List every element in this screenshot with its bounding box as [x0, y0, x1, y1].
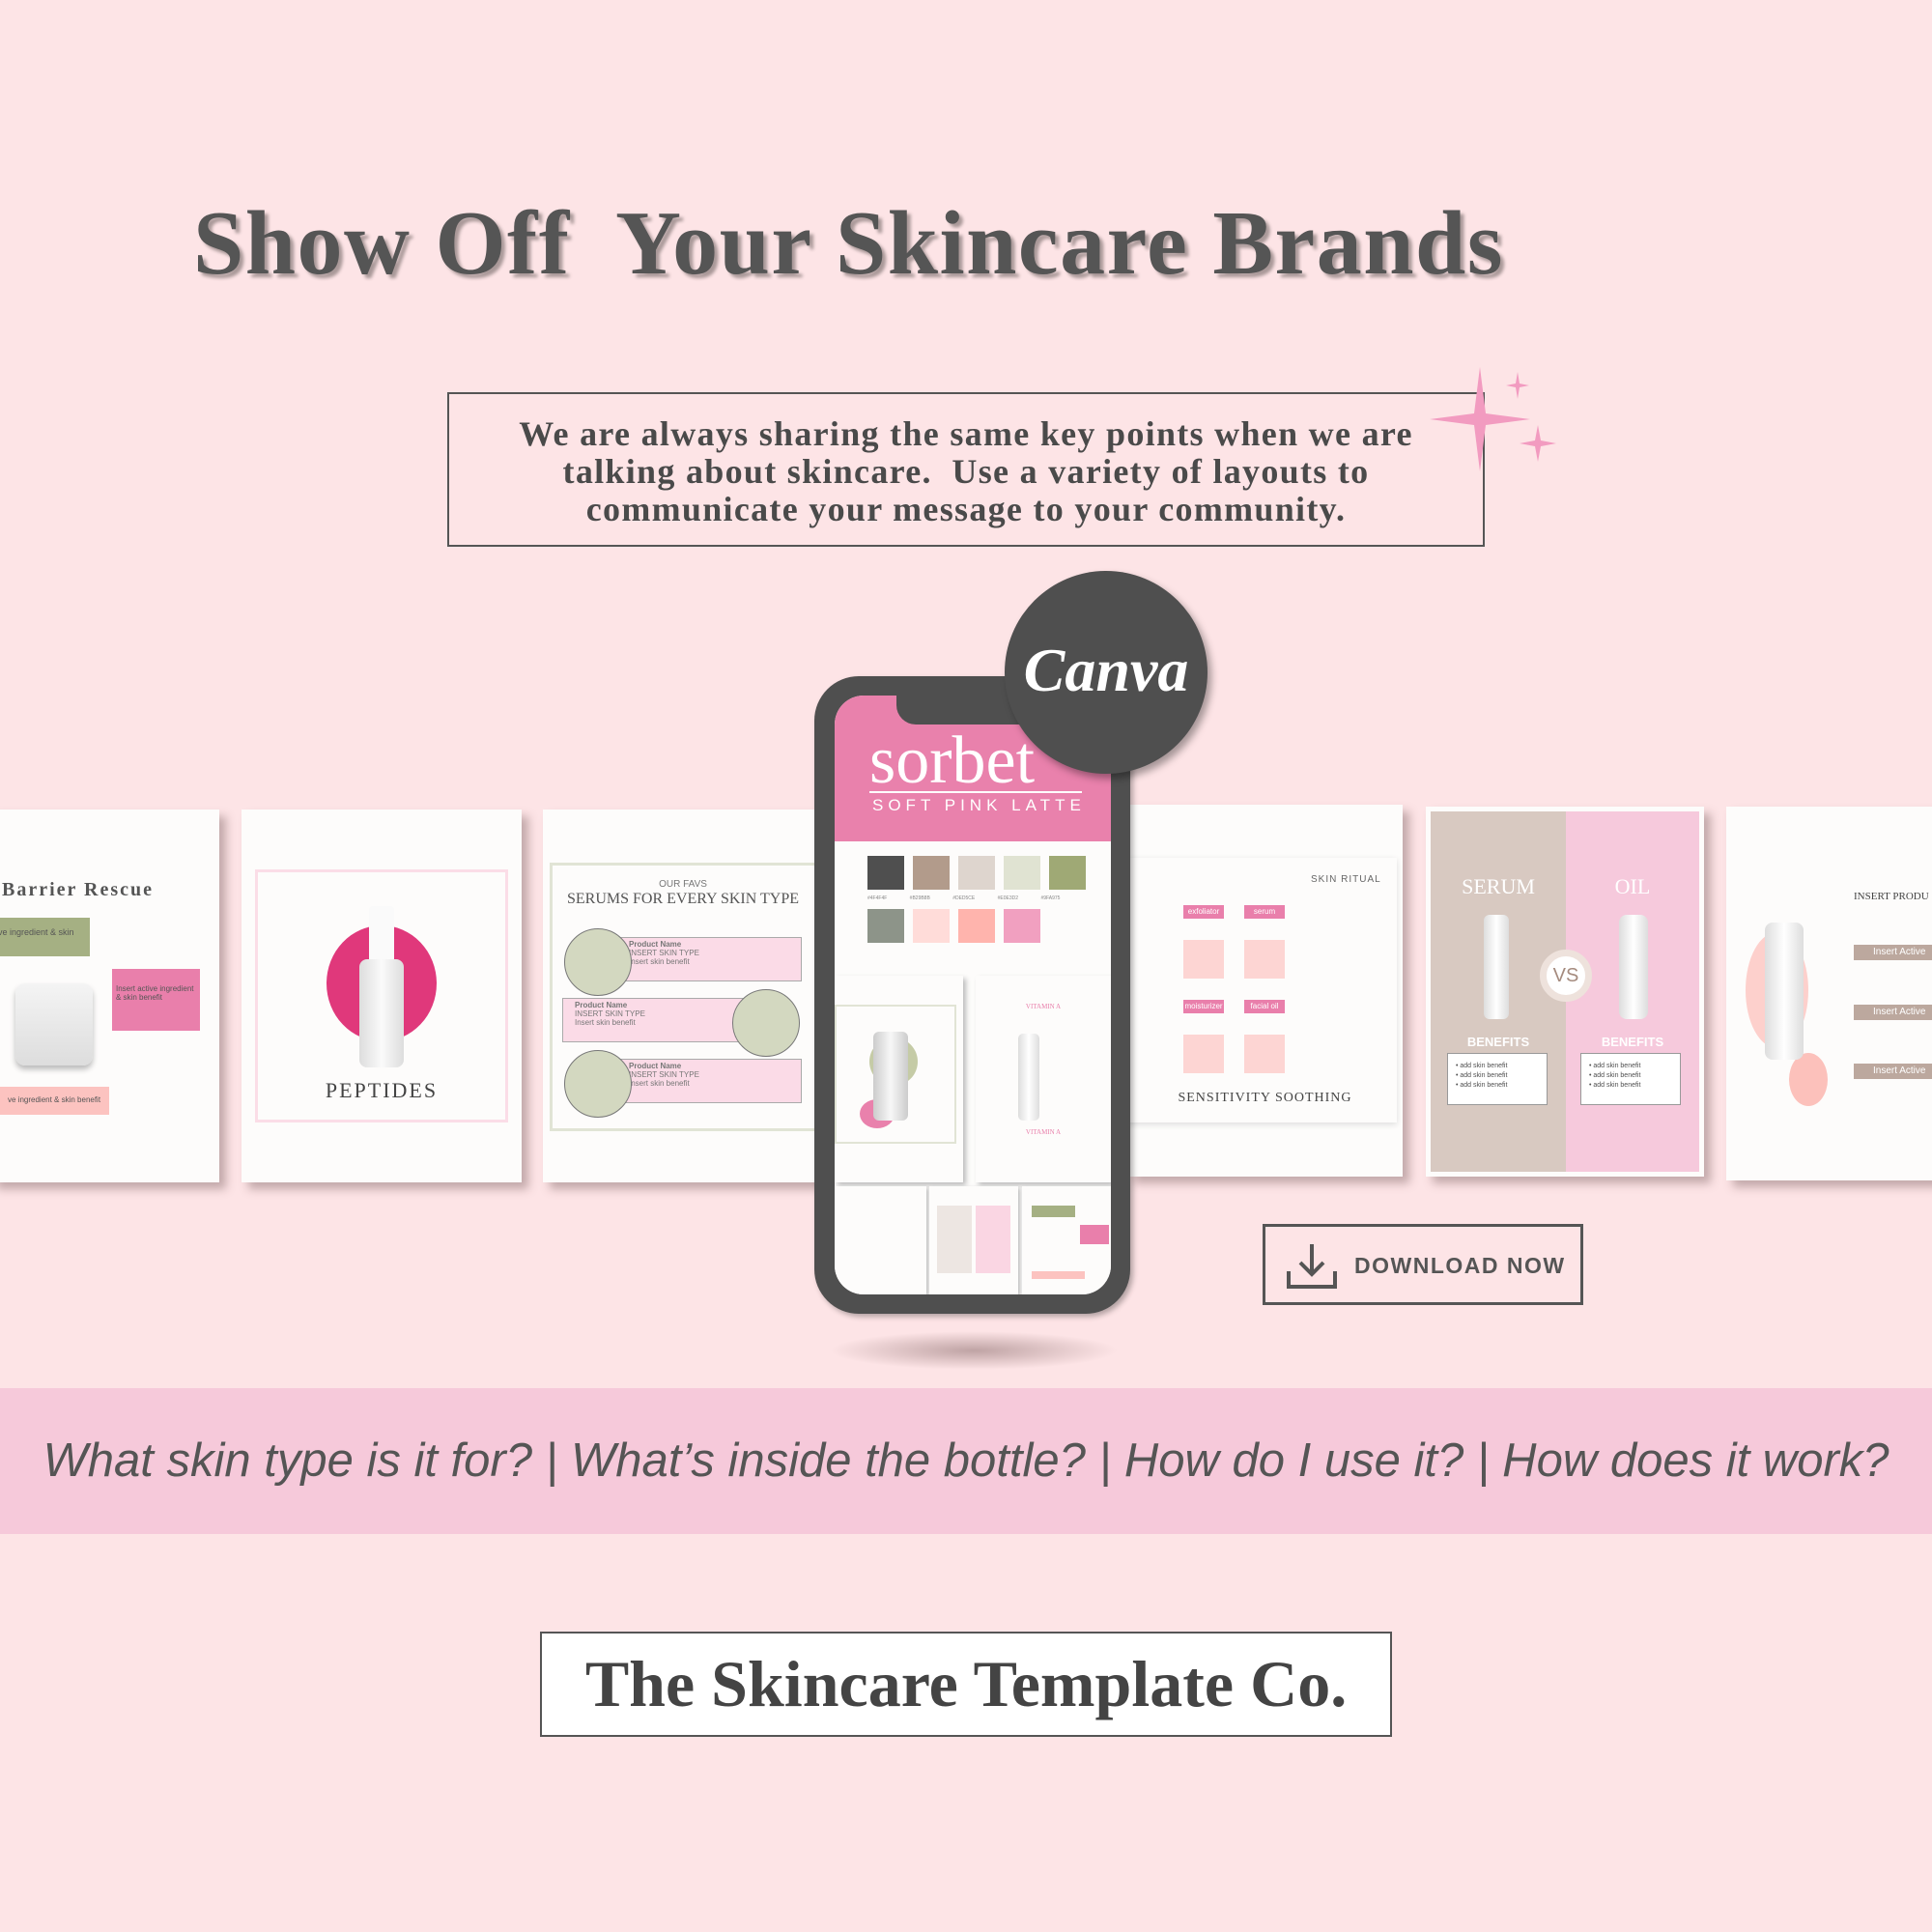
- card: skin ritual: [1127, 805, 1403, 1177]
- card: serums for every skin type: INSERT SKIN TYPE: [629, 1070, 699, 1079]
- card: serum vs oil: • add skin benefit: [1589, 1063, 1640, 1069]
- phone notch: [896, 696, 1051, 724]
- card: serum vs oil: • add skin benefit: [1589, 1072, 1640, 1079]
- color palette: #4F4F4F #B29B8B #DED5CE #E0E3D2 #9FA975: [867, 895, 1060, 901]
- card: barrier rescue: Barrier Rescue: [2, 879, 154, 900]
- intro text box: communicate your message to your community.: [586, 490, 1346, 528]
- card: barrier rescue: Insert active ingredient & skin benefit: [116, 984, 193, 1002]
- card: serum vs oil: • add skin benefit: [1456, 1063, 1507, 1069]
- screen header: sorbet: [835, 696, 1111, 841]
- title: Show Off Your Skincare Brands: [193, 193, 1504, 294]
- brand name box: The Skincare Template Co.: [585, 1647, 1347, 1720]
- band: questions: What skin type is it for? | What’s inside the bottle? | How do I use it? | How does it work?: [43, 1435, 1889, 1487]
- card: serums for every skin type: Product Name: [575, 1001, 627, 1009]
- card: skin ritual: moisturizer: [1184, 1002, 1223, 1010]
- icon: download: [1287, 1244, 1337, 1289]
- card: serums for every skin type: [543, 810, 823, 1182]
- intro text box: talking about skincare. Use a variety of layouts to: [563, 452, 1369, 491]
- badge: Canva: Canva: [1024, 636, 1188, 704]
- card: serums for every skin type: INSERT SKIN TYPE: [629, 949, 699, 957]
- card: serums for every skin type: Insert skin benefit: [575, 1018, 636, 1027]
- card: serums for every skin type: Product Name: [629, 940, 681, 949]
- intro text box: We are always sharing the same key points when we are: [519, 414, 1413, 453]
- screen header: sorbet: SOFT PINK LATTE: [872, 796, 1086, 814]
- card: serums for every skin type: Insert skin benefit: [629, 1079, 690, 1088]
- phone screen: [835, 696, 1111, 1294]
- icon: peptide bottle: [327, 925, 437, 1041]
- badge: Canva: [1005, 571, 1208, 774]
- card: serums for every skin type: Insert skin benefit: [629, 957, 690, 966]
- color palette: [867, 856, 1086, 943]
- screen header: sorbet: sorbet: [869, 724, 1035, 798]
- card: skin ritual: SKIN RITUAL: [1311, 874, 1381, 885]
- card: serum vs oil: [1426, 807, 1704, 1177]
- card: insert product: Insert Active: [1873, 1065, 1925, 1076]
- phone shadow: [829, 1331, 1119, 1370]
- card: serum vs oil: • add skin benefit: [1456, 1082, 1507, 1089]
- phone screen: VITAMIN A: [1026, 1003, 1061, 1010]
- card: serums for every skin type: OUR FAVS: [659, 879, 707, 890]
- card: serum vs oil: SERUM: [1462, 874, 1535, 898]
- card: barrier rescue: [0, 810, 219, 1182]
- card: insert product: INSERT PRODU: [1854, 891, 1929, 902]
- card: barrier rescue: ve ingredient & skin: [0, 927, 74, 937]
- phone screen: VITAMIN A: [1026, 1128, 1061, 1136]
- card: serums for every skin type: INSERT SKIN TYPE: [575, 1009, 645, 1018]
- card: serum vs oil: BENEFITS: [1467, 1035, 1529, 1049]
- card: serum vs oil: VS: [1553, 965, 1578, 986]
- card: serums for every skin type: SERUMS FOR EVERY SKIN TYPE: [567, 891, 799, 907]
- card: skin ritual: facial oil: [1251, 1002, 1278, 1010]
- card: barrier rescue: ve ingredient & skin benefit: [8, 1095, 100, 1104]
- card: serum vs oil: OIL: [1615, 874, 1650, 898]
- screen mini cards: [835, 976, 963, 1182]
- card: peptides: [242, 810, 522, 1182]
- card: skin ritual: exfoliator: [1188, 907, 1219, 916]
- card: peptides: PEPTIDES: [326, 1078, 438, 1102]
- card: insert product: Insert Active: [1873, 947, 1925, 957]
- card: skin ritual: SENSITIVITY SOOTHING: [1178, 1091, 1352, 1105]
- brand name box: [540, 1632, 1392, 1737]
- phone: [814, 676, 1130, 1314]
- card: skin ritual: serum: [1254, 907, 1275, 916]
- card: serum vs oil: • add skin benefit: [1456, 1072, 1507, 1079]
- button: download now: [1263, 1224, 1583, 1305]
- card: serum vs oil: BENEFITS: [1602, 1035, 1663, 1049]
- icon: sparkles: [1430, 367, 1555, 471]
- card: serums for every skin type: Product Name: [629, 1062, 681, 1070]
- band: questions: [0, 1388, 1932, 1534]
- intro text box: [447, 392, 1485, 547]
- button: download now: DOWNLOAD NOW: [1354, 1253, 1566, 1278]
- card: insert product: Insert Active: [1873, 1007, 1925, 1017]
- card: insert product: [1726, 807, 1932, 1180]
- card: serum vs oil: • add skin benefit: [1589, 1082, 1640, 1089]
